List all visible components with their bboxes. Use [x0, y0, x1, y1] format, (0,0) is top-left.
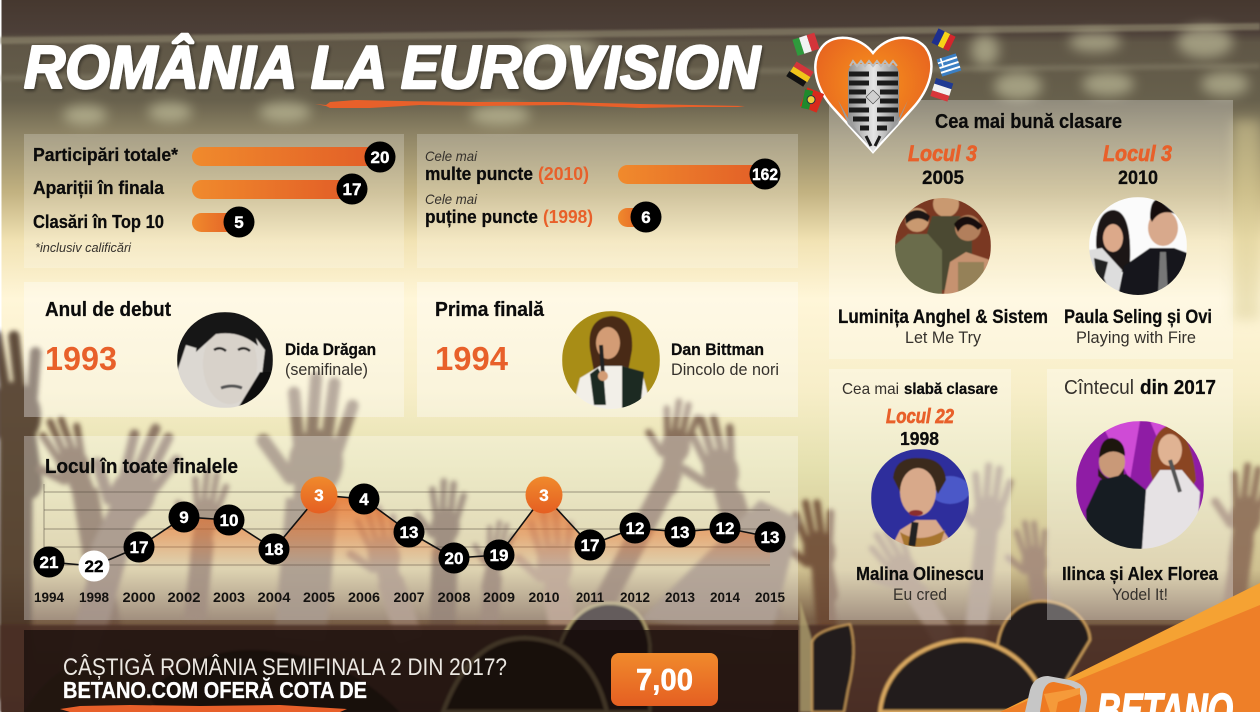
data point 2003	[213, 504, 245, 605]
chart area fill	[139, 495, 770, 568]
data point 2010 highlight	[526, 476, 562, 605]
data point 1994: 1994	[34, 589, 64, 605]
stat: fewest points: (1998)	[543, 207, 593, 227]
data point 2012: 2012	[620, 589, 650, 605]
panel: betting offer	[24, 630, 798, 712]
flag: Germany	[786, 61, 814, 87]
data point 2006	[348, 484, 380, 605]
icon: heart with microphone and flags	[786, 28, 961, 152]
data point 2004	[258, 534, 291, 605]
name: Ilinca și Alex Florea: Ilinca și Alex Florea	[1062, 564, 1219, 584]
year: 1993	[45, 340, 117, 377]
data point 2005 highlight	[300, 476, 338, 605]
stat: most points: (2010)	[538, 164, 589, 184]
song: Eu cred: Eu cred	[893, 585, 947, 604]
data point 2009	[483, 540, 515, 605]
data point 2014	[710, 512, 740, 605]
data point 2015: 2015	[755, 589, 785, 605]
placement 2005: 2005	[922, 168, 964, 189]
flag: Portugal	[798, 87, 824, 114]
heading: Cea mai bună clasare	[935, 111, 1122, 133]
data point 2003: 2003	[213, 589, 245, 605]
song: Dincolo de nori: Dincolo de nori	[671, 361, 779, 379]
stat: fewest points: Cele mai	[425, 191, 478, 207]
heart	[815, 38, 931, 152]
note: semifinale: (semifinale)	[285, 361, 368, 379]
data point 1998: 22	[85, 557, 103, 576]
data point 2002: 2002	[168, 589, 201, 605]
data point 2005 highlight: 3	[314, 486, 324, 505]
portrait: Dida Drăgan	[177, 312, 273, 408]
name: Dida Drăgan: Dida Drăgan	[285, 341, 376, 359]
panel: points	[417, 134, 798, 268]
panel: best placements	[829, 100, 1233, 359]
data point 1994: 21	[40, 553, 58, 572]
data point 2011: 17	[581, 536, 599, 555]
data point 2007: 2007	[394, 589, 425, 605]
stat: participări totale: 20	[371, 148, 389, 167]
year: 1994	[435, 340, 509, 377]
data point 2012	[620, 512, 650, 605]
chart heading: Locul în toate finalele	[45, 456, 238, 478]
name: Luminița Anghel & Sistem: Luminița Anghel & Sistem	[838, 307, 1048, 328]
microphone	[838, 61, 908, 152]
data point 2009: 2009	[483, 589, 515, 605]
data point 2004: 18	[265, 540, 283, 559]
heading: slabă clasare	[904, 381, 998, 398]
data point 2010 highlight: 3	[539, 486, 549, 505]
heading	[842, 381, 998, 398]
question text: CÂȘTIGĂ ROMÂNIA SEMIFINALA 2 DIN 2017?	[63, 654, 507, 681]
stat: apariții în finala: Apariții în finala	[33, 178, 165, 198]
data point 2008	[438, 542, 471, 605]
stat: clasări în top 10: Clasări în Top 10	[33, 212, 164, 232]
data point 2008: 2008	[438, 589, 471, 605]
data point 2014: 12	[716, 519, 734, 538]
placement 1998: 1998	[900, 429, 939, 449]
chart line	[49, 495, 770, 566]
data point 2011: 2011	[576, 589, 604, 605]
data point 2004: 2004	[258, 589, 291, 605]
placement 2010: Locul 3	[1103, 141, 1172, 166]
placement 2010	[1103, 141, 1172, 189]
heading: Anul de debut	[45, 299, 171, 321]
panel: worst placement	[829, 369, 1011, 620]
data point 2000	[122, 532, 156, 605]
heading: Cea mai	[842, 381, 899, 398]
data point 2013: 13	[671, 523, 689, 542]
song: Playing with Fire: Playing with Fire	[1076, 328, 1196, 347]
crowd heads	[0, 600, 1260, 712]
data point 2011	[574, 530, 606, 605]
data point 2006: 2006	[348, 589, 380, 605]
panel: final placements chart	[24, 436, 798, 620]
panel: first final	[417, 282, 798, 417]
title brush stroke	[315, 100, 745, 108]
data point 1998: 1998	[79, 589, 109, 605]
stat: participări totale	[33, 142, 396, 172]
data point 2008: 20	[445, 549, 463, 568]
stat: fewest points	[425, 191, 662, 232]
data point 2013: 2013	[665, 589, 695, 605]
data point 2010 highlight: 2010	[528, 589, 560, 605]
crowd silhouettes	[0, 330, 1260, 712]
stat: fewest points: 6	[641, 208, 651, 227]
portrait: Dan Bittman	[562, 311, 660, 410]
title: ROMÂNIA LA EUROVISION	[24, 34, 762, 101]
panel: totals	[24, 134, 404, 268]
data point 2000: 2000	[122, 589, 156, 605]
name: Malina Olinescu: Malina Olinescu	[856, 564, 984, 584]
data point 1994	[34, 546, 64, 605]
portrait: Ilinca și Alex Florea	[1076, 421, 1204, 549]
heading: Prima finală	[435, 299, 545, 321]
portrait: Paula Seling și Ovi	[1089, 197, 1190, 296]
name: Dan Bittman: Dan Bittman	[671, 341, 764, 359]
data point 2007	[394, 516, 425, 605]
data point 2015: 13	[761, 528, 779, 547]
placement 2010: 2010	[1118, 168, 1158, 189]
heading: din 2017	[1140, 377, 1216, 399]
data point 2002	[168, 502, 201, 605]
stat: apariții în finala	[33, 174, 368, 204]
stat: clasări în top 10	[33, 206, 254, 238]
data point 1998	[78, 550, 110, 605]
heading: Cîntecul	[1064, 377, 1134, 399]
panel: song of 2017	[1047, 369, 1233, 620]
portrait: Malina Olinescu	[871, 449, 970, 550]
data point 2015	[754, 522, 786, 605]
data point 2006: 4	[359, 490, 369, 509]
corner banner: Betano	[1000, 583, 1260, 712]
footnote: *inclusiv calificări	[35, 240, 132, 255]
data point 2000: 17	[130, 538, 148, 557]
data point 2013	[664, 516, 696, 605]
data point 2009: 19	[490, 546, 508, 565]
data point 2007: 13	[400, 523, 418, 542]
offer text: BETANO.COM OFERĂ COTA DE	[63, 676, 367, 703]
placement 1998: Locul 22	[886, 406, 954, 428]
stat: most points: 162	[752, 165, 778, 184]
flag: Greece	[937, 53, 961, 77]
data point 2014: 2014	[710, 589, 740, 605]
stat: fewest points: puține puncte	[425, 207, 538, 227]
odds button	[611, 653, 718, 706]
odds button: 7,00	[636, 662, 693, 697]
flag: France	[930, 78, 953, 102]
icon: Betano logo mark	[1025, 676, 1087, 712]
stat: participări totale: Participări totale*	[33, 145, 178, 165]
panel: debut year	[24, 282, 404, 417]
heading	[1064, 377, 1216, 399]
placement 1998	[886, 406, 954, 449]
placement 2005	[908, 141, 977, 189]
data point 2003: 10	[220, 511, 238, 530]
flag: Italy	[792, 33, 820, 56]
stat: most points: multe puncte	[425, 164, 533, 184]
placement 2005: Locul 3	[908, 141, 977, 166]
data point 2012: 12	[626, 519, 644, 538]
flag: Romania	[932, 28, 956, 51]
song: Let Me Try: Let Me Try	[905, 328, 981, 347]
portrait: Luminița Anghel & Sistem	[894, 191, 991, 294]
name: Paula Seling și Ovi: Paula Seling și Ovi	[1064, 307, 1212, 328]
offer brush stroke	[60, 705, 347, 712]
data point 2005 highlight: 2005	[303, 589, 335, 605]
stat: apariții în finala: 17	[343, 180, 361, 199]
data point 2002: 9	[179, 508, 189, 527]
stat: clasări în top 10: 5	[234, 213, 244, 232]
song: Yodel It!: Yodel It!	[1112, 585, 1168, 604]
stat: most points: Cele mai	[425, 148, 478, 164]
stat: most points	[425, 148, 780, 190]
